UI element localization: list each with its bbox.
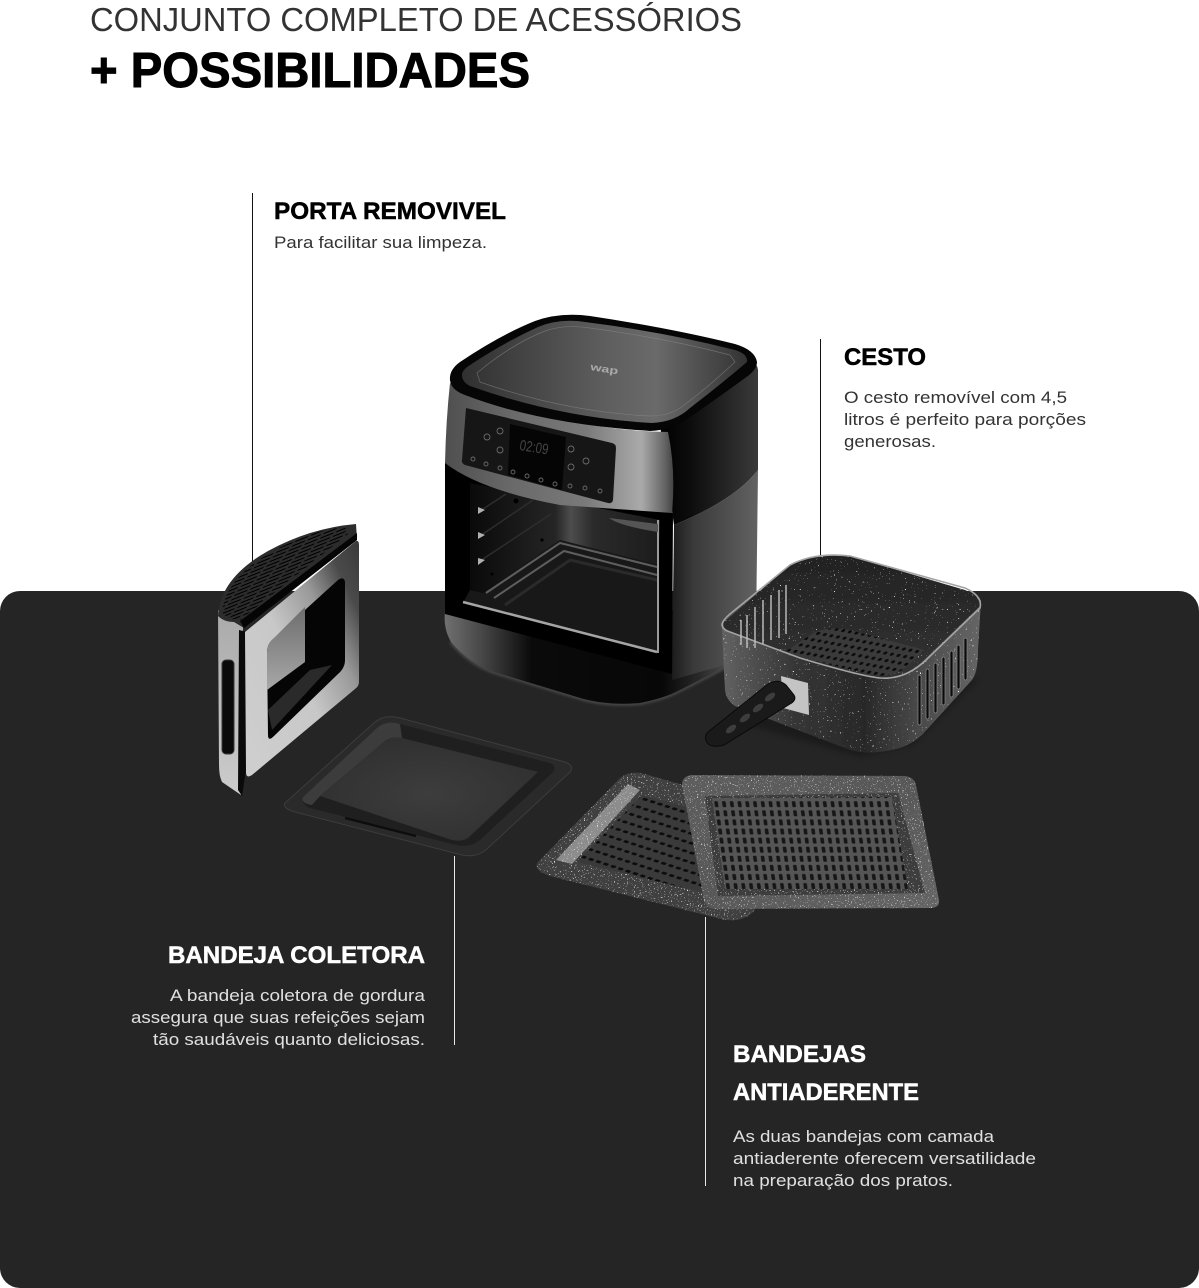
- tray back slits: [577, 795, 705, 893]
- label: porta removivel: Para facilitar sua limpeza.: [274, 233, 487, 252]
- door side: [218, 610, 243, 795]
- leader line: bandejas antiaderente: [705, 917, 706, 1186]
- steel band: [445, 383, 673, 513]
- handle holes: [724, 691, 777, 735]
- label: cesto: litros é perfeito para porções: [844, 410, 1086, 429]
- base glow: [451, 642, 735, 704]
- nonstick tray front: [682, 775, 939, 909]
- door top vents: [218, 524, 357, 628]
- label: bandeja coletora: assegura que suas refeições sejam: [131, 1008, 425, 1027]
- control panel: 02:09: [518, 437, 550, 458]
- basket shadow: [730, 660, 978, 757]
- label: bandeja coletora: A bandeja coletora de gordura: [170, 986, 426, 1005]
- drip tray: [284, 717, 572, 856]
- window reflection: [267, 607, 305, 690]
- glass top: [462, 321, 747, 423]
- air fryer: [445, 315, 758, 704]
- leader line: bandeja coletora: [454, 856, 455, 1045]
- basket floor: [783, 628, 925, 676]
- dark panel: [0, 591, 1199, 1288]
- basket floor holes: [783, 628, 925, 676]
- label: bandejas antiaderente: ANTIADERENTE: [733, 1079, 919, 1106]
- label: porta removivel: [274, 198, 506, 252]
- basket left slots: [741, 585, 786, 648]
- label: bandejas antiaderente: na preparação dos pratos.: [733, 1171, 953, 1190]
- label: cesto: CESTO: [844, 344, 926, 371]
- basket rim: [722, 555, 980, 678]
- handle: [706, 681, 795, 746]
- heading: + POSSIBILIDADES: [90, 44, 530, 98]
- brand logo: wap: [588, 362, 619, 377]
- glass inset line: [477, 327, 735, 416]
- basket: [706, 555, 981, 757]
- nonstick tray back: [536, 773, 755, 920]
- label: cesto: O cesto removível com 4,5: [844, 388, 1067, 407]
- control panel: [462, 408, 616, 503]
- heading: [90, 1, 742, 98]
- base: [445, 610, 735, 704]
- handle slot: [222, 660, 234, 754]
- label: bandejas antiaderente: As duas bandejas com camada: [733, 1127, 995, 1146]
- leader line: cesto: [820, 339, 821, 559]
- lid rim: [450, 315, 757, 431]
- basket outer wall: [722, 600, 981, 753]
- label: bandejas antiaderente: BANDEJAS: [733, 1041, 866, 1068]
- right side lower body: [672, 470, 758, 680]
- door window: [267, 578, 345, 739]
- tray left highlight: [556, 784, 640, 864]
- front frame: [445, 463, 673, 674]
- removable door: [218, 524, 359, 796]
- door frame: [245, 541, 359, 776]
- label: porta removivel: PORTA REMOVIVEL: [274, 198, 506, 225]
- label: bandeja coletora: tão saudáveis quanto deliciosas.: [153, 1030, 425, 1049]
- right side upper body: [660, 364, 758, 525]
- label: bandeja coletora: [131, 942, 426, 1049]
- label: cesto: generosas.: [844, 432, 936, 451]
- label: bandejas antiaderente: [733, 1041, 1036, 1190]
- basket right slots: [918, 638, 967, 725]
- oven interior: [463, 483, 660, 653]
- window floor slits: [268, 665, 332, 730]
- handle bracket: [781, 676, 809, 715]
- label: cesto: [844, 344, 1086, 451]
- basket inner wall: [724, 555, 980, 678]
- label: bandejas antiaderente: antiaderente oferecem versatilidade: [733, 1149, 1036, 1168]
- label: bandeja coletora: BANDEJA COLETORA: [168, 942, 425, 969]
- heading: CONJUNTO COMPLETO DE ACESSÓRIOS: [90, 1, 742, 38]
- black edge: [238, 630, 247, 796]
- leader line: porta removivel: [252, 193, 253, 573]
- tray front holes: [712, 797, 908, 889]
